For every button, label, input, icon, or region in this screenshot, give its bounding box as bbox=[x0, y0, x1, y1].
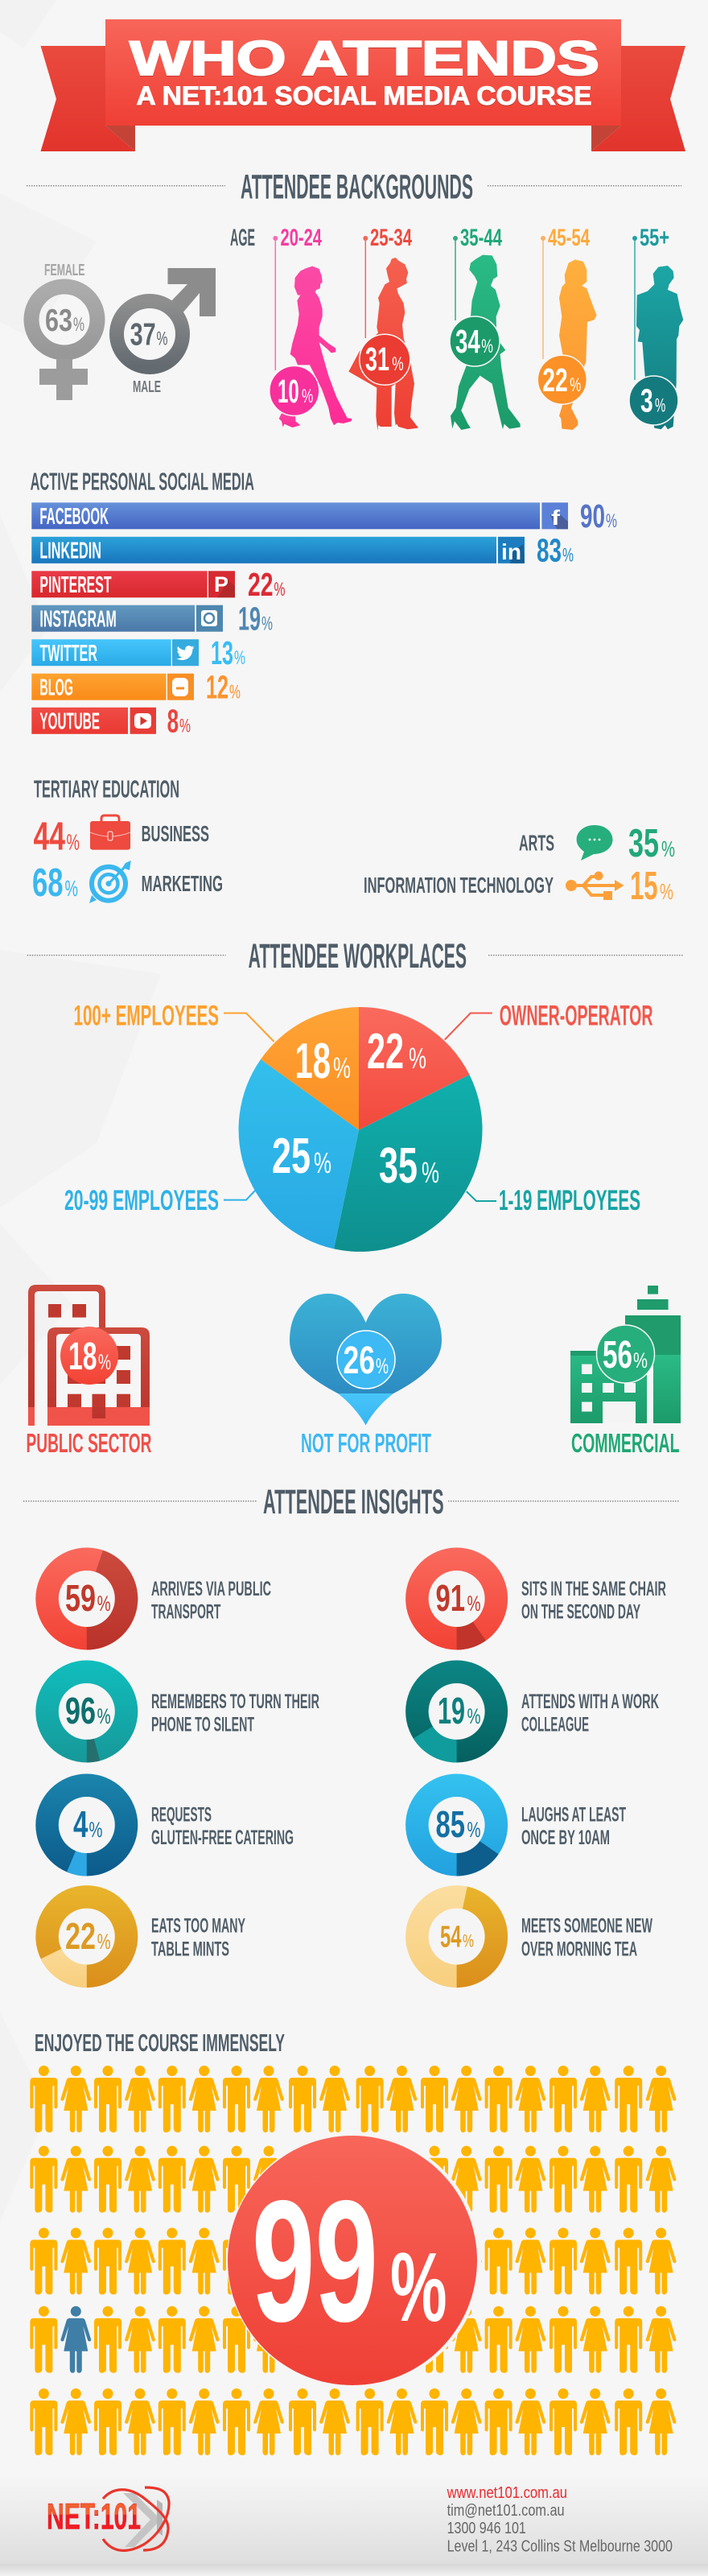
pie label: 20-99 employees: 20-99 EMPLOYEES bbox=[64, 1185, 219, 1216]
education: information technology 15%: % bbox=[660, 879, 673, 904]
bar: instagram 19%: INSTAGRAM bbox=[39, 607, 117, 633]
bar: youtube 8%: YOUTUBE bbox=[39, 708, 100, 734]
insight: requests gluten-free catering 4%: % bbox=[88, 1818, 103, 1842]
pie chart: workplace sizes: 22 bbox=[367, 1024, 404, 1080]
insight: remembers to silence phone 96%: % bbox=[97, 1704, 111, 1728]
insight: eats too many table mints 22%: TABLE MINTS bbox=[151, 1938, 229, 1960]
icon: female symbol 63%: % bbox=[73, 314, 84, 336]
pie chart: workplace sizes: 18 bbox=[294, 1034, 331, 1089]
insight: meets someone new over morning tea 54% bbox=[405, 1885, 652, 1988]
footer bbox=[0, 2475, 708, 2576]
age group 55+: 3 bbox=[640, 382, 653, 419]
bar: youtube 8%: % bbox=[179, 715, 191, 737]
pie label: 100+ employees bbox=[74, 1001, 274, 1042]
icon: public sector buildings 18%: 18 bbox=[68, 1335, 97, 1378]
insight: arrives via public transport 59%: TRANSPORT bbox=[151, 1600, 220, 1623]
heading: attendee backgrounds: ATTENDEE BACKGROUNDS bbox=[241, 167, 473, 206]
bar: linkedin 83%: in bbox=[501, 539, 521, 564]
age group 25-34 bbox=[348, 225, 418, 431]
bar: youtube 8% bbox=[31, 702, 191, 739]
insight: remembers to silence phone 96%: 96 bbox=[65, 1690, 96, 1732]
subtitle: A NET:101 SOCIAL MEDIA COURSE bbox=[137, 81, 592, 110]
age group 20-24: % bbox=[302, 386, 313, 407]
bar: pinterest 22%: P bbox=[214, 572, 228, 597]
icon: female symbol 63%: FEMALE bbox=[44, 262, 85, 279]
bar: facebook 90%: f bbox=[551, 506, 560, 530]
insight: attends with a work colleague 19%: 19 bbox=[438, 1690, 465, 1732]
contact details: tim@net101.com.au bbox=[447, 2502, 565, 2520]
bar: instagram 19%: 19 bbox=[238, 601, 261, 638]
age group 55+: % bbox=[655, 395, 665, 417]
education: business 44%: 44 bbox=[34, 815, 65, 859]
insight: arrives via public transport 59% bbox=[35, 1547, 271, 1650]
bar: linkedin 83%: % bbox=[562, 544, 574, 567]
insight: sits in the same chair 91%: 91 bbox=[436, 1577, 465, 1619]
icon: not for profit heart 26%: 26 bbox=[343, 1340, 375, 1382]
contact details: www.net101.com.au bbox=[447, 2484, 567, 2502]
pictogram: 100 people bbox=[30, 2066, 677, 2455]
insight: remembers to silence phone 96% bbox=[35, 1660, 319, 1763]
age group 45-54: % bbox=[570, 374, 581, 396]
subheading: enjoyed the course immensely: ENJOYED THE COURSE IMMENSELY bbox=[35, 2029, 285, 2057]
age group 35-44: 34 bbox=[455, 323, 480, 360]
icon: male symbol 37%: MALE bbox=[133, 378, 161, 396]
bar: twitter 13%: TWITTER bbox=[39, 641, 97, 667]
pie chart: workplace sizes: % bbox=[409, 1042, 426, 1075]
insight: eats too many table mints 22% bbox=[35, 1885, 245, 1988]
insight: remembers to silence phone 96%: PHONE TO SILENT bbox=[151, 1713, 254, 1736]
bar: blog 12%: % bbox=[229, 681, 241, 704]
education: arts 35%: % bbox=[661, 836, 675, 861]
bar: pinterest 22%: PINTEREST bbox=[39, 572, 112, 598]
insight: eats too many table mints 22%: 22 bbox=[65, 1915, 96, 1957]
icon: not for profit heart 26% bbox=[290, 1294, 442, 1459]
insight: remembers to silence phone 96%: REMEMBERS TO TURN THEIR bbox=[151, 1690, 319, 1713]
age group 20-24: 20-24 bbox=[280, 225, 322, 251]
bar: instagram 19%: % bbox=[261, 613, 273, 634]
callout: 99%: 99 bbox=[252, 2164, 378, 2358]
education: business 44% bbox=[34, 815, 209, 859]
age group 55+: 55+ bbox=[640, 225, 669, 251]
age group 25-34: % bbox=[392, 353, 404, 375]
age group 35-44: % bbox=[481, 336, 493, 357]
education: business 44%: BUSINESS bbox=[142, 821, 209, 846]
insight: requests gluten-free catering 4% bbox=[35, 1774, 294, 1876]
insight: meets someone new over morning tea 54%: 54 bbox=[440, 1921, 462, 1955]
pie chart: workplace sizes: % bbox=[333, 1051, 351, 1084]
age group 20-24: 10 bbox=[278, 373, 299, 410]
age group 25-34: 25-34 bbox=[370, 225, 412, 251]
insight: eats too many table mints 22%: EATS TOO MANY bbox=[151, 1915, 245, 1938]
insight: arrives via public transport 59%: ARRIVES VIA PUBLIC bbox=[151, 1578, 271, 1600]
education: marketing 68%: % bbox=[64, 876, 78, 901]
education: marketing 68%: 68 bbox=[32, 861, 64, 905]
pie label: 1-19 employees bbox=[467, 1185, 640, 1216]
age group 20-24 bbox=[270, 225, 352, 427]
insight: attends with a work colleague 19% bbox=[405, 1660, 659, 1763]
heading: attendee insights: ATTENDEE INSIGHTS bbox=[263, 1483, 444, 1521]
education: information technology 15%: 15 bbox=[630, 865, 658, 908]
education: marketing 68%: MARKETING bbox=[142, 871, 223, 896]
insight: attends with a work colleague 19%: COLLEAGUE bbox=[521, 1713, 589, 1736]
insight: meets someone new over morning tea 54%: % bbox=[463, 1930, 474, 1951]
icon: male symbol 37%: 37 bbox=[130, 317, 156, 353]
icon: not for profit heart 26%: NOT FOR PROFIT bbox=[301, 1429, 431, 1459]
age group 45-54 bbox=[537, 225, 597, 430]
bar: facebook 90%: FACEBOOK bbox=[39, 504, 109, 530]
pie label: 100+ employees: 100+ EMPLOYEES bbox=[74, 1001, 219, 1032]
bar: twitter 13% bbox=[31, 634, 245, 671]
insight: requests gluten-free catering 4%: 4 bbox=[73, 1803, 88, 1845]
icon: commercial buildings 56%: 56 bbox=[603, 1334, 632, 1377]
pie label: owner-operator bbox=[445, 1001, 653, 1040]
age group 25-34: 31 bbox=[365, 341, 389, 378]
bar: pinterest 22%: % bbox=[274, 579, 285, 601]
bar: youtube 8%: 8 bbox=[167, 702, 179, 739]
bar: blog 12%: BLOG bbox=[39, 675, 73, 700]
bar: linkedin 83%: LINKEDIN bbox=[39, 538, 101, 564]
contact details: 1300 946 101 bbox=[447, 2520, 526, 2537]
title text: WHO ATTENDS bbox=[130, 31, 599, 85]
age group 55+ bbox=[629, 225, 683, 429]
callout: 99% bbox=[227, 2133, 481, 2388]
pie chart: workplace sizes: % bbox=[314, 1146, 331, 1179]
callout: 99%: % bbox=[390, 2232, 447, 2342]
bar: facebook 90%: % bbox=[606, 510, 617, 532]
bar: pinterest 22%: 22 bbox=[248, 566, 274, 603]
bar: blog 12%: 12 bbox=[206, 668, 228, 705]
bar: linkedin 83% bbox=[31, 531, 574, 568]
icon: commercial buildings 56% bbox=[570, 1286, 681, 1459]
education: arts 35%: 35 bbox=[628, 822, 659, 865]
education: business 44%: % bbox=[66, 830, 80, 855]
bar: twitter 13%: 13 bbox=[211, 634, 233, 671]
subheading: tertiary education: TERTIARY EDUCATION bbox=[34, 776, 179, 803]
icon: public sector buildings 18%: PUBLIC SECTOR bbox=[26, 1429, 151, 1459]
insight: laughs at least once by 10am 85%: ONCE BY 10AM bbox=[521, 1827, 610, 1849]
insight: arrives via public transport 59%: 59 bbox=[65, 1577, 96, 1619]
insight: attends with a work colleague 19%: % bbox=[467, 1704, 481, 1728]
insight: requests gluten-free catering 4%: GLUTEN-FREE CATERING bbox=[151, 1827, 294, 1849]
bar: linkedin 83%: 83 bbox=[537, 531, 562, 568]
logo: NET:101: NET:101 bbox=[47, 2496, 141, 2537]
education: arts 35%: ARTS bbox=[519, 831, 554, 856]
insight: arrives via public transport 59%: % bbox=[97, 1591, 111, 1616]
bar: facebook 90% bbox=[31, 497, 617, 535]
icon: female symbol 63% bbox=[31, 262, 97, 400]
insight: laughs at least once by 10am 85%: 85 bbox=[436, 1803, 465, 1845]
age group 45-54: 45-54 bbox=[548, 225, 590, 251]
insight: laughs at least once by 10am 85%: % bbox=[467, 1818, 481, 1842]
education: information technology 15%: INFORMATION TECHNOLOGY bbox=[364, 873, 554, 898]
bar: instagram 19% bbox=[31, 601, 273, 638]
icon: commercial buildings 56%: % bbox=[633, 1348, 648, 1373]
icon: public sector buildings 18% bbox=[26, 1285, 151, 1459]
logo: NET:101 bbox=[47, 2487, 169, 2550]
title banner bbox=[40, 19, 685, 151]
text: AGE bbox=[230, 225, 255, 251]
insight: laughs at least once by 10am 85%: LAUGHS AT LEAST bbox=[521, 1803, 626, 1826]
pie chart: workplace sizes: 25 bbox=[272, 1129, 311, 1184]
education: information technology 15% bbox=[364, 865, 673, 908]
bar: twitter 13%: % bbox=[234, 647, 245, 669]
age group 45-54: 22 bbox=[542, 361, 568, 398]
insight: sits in the same chair 91%: % bbox=[467, 1591, 481, 1616]
insight: sits in the same chair 91% bbox=[405, 1547, 666, 1650]
icon: public sector buildings 18%: % bbox=[98, 1350, 111, 1374]
bar: blog 12% bbox=[31, 668, 241, 705]
age group 35-44 bbox=[450, 225, 521, 430]
age group 35-44: 35-44 bbox=[460, 225, 502, 251]
icon: male symbol 37% bbox=[117, 268, 216, 396]
insight: eats too many table mints 22%: % bbox=[97, 1930, 111, 1954]
pie chart: workplace sizes bbox=[239, 1007, 483, 1252]
bar: pinterest 22% bbox=[31, 566, 286, 603]
pie chart: workplace sizes: 35 bbox=[379, 1138, 418, 1194]
education: arts 35% bbox=[519, 822, 675, 865]
insight: requests gluten-free catering 4%: REQUESTS bbox=[151, 1803, 212, 1826]
icon: not for profit heart 26%: % bbox=[376, 1354, 389, 1378]
heading: attendee workplaces: ATTENDEE WORKPLACES bbox=[249, 937, 467, 976]
education: marketing 68% bbox=[32, 861, 223, 905]
pie chart: workplace sizes: % bbox=[422, 1156, 439, 1189]
bar: facebook 90%: 90 bbox=[580, 497, 605, 535]
subheading: active personal social media: ACTIVE PERSONAL SOCIAL MEDIA bbox=[31, 469, 254, 496]
icon: female symbol 63%: 63 bbox=[45, 303, 72, 338]
contact details bbox=[447, 2484, 673, 2556]
icon: male symbol 37%: % bbox=[156, 328, 167, 349]
insight: laughs at least once by 10am 85% bbox=[405, 1774, 626, 1876]
